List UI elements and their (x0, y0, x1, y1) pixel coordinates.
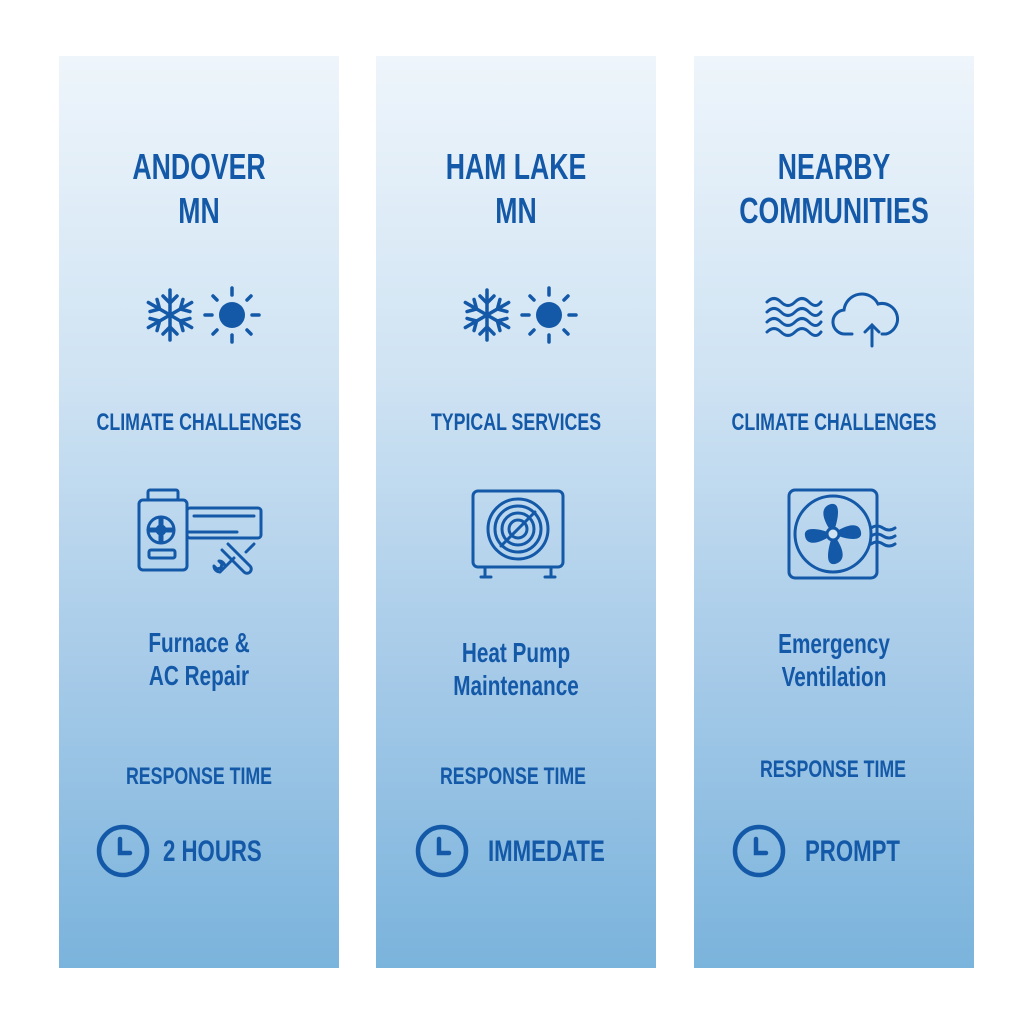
title: Ham Lake MN (446, 146, 586, 231)
panel: Ham Lake (376, 56, 656, 968)
value: prompt: PROMPT (805, 835, 900, 868)
panel: Nearby (694, 56, 974, 968)
icon: clock (96, 824, 150, 878)
icon: clock (416, 824, 468, 878)
icon: snowflake and sun (Ham Lake) (464, 286, 578, 344)
title: Nearby Communities: NEARBY (778, 146, 890, 187)
value: 2 hours: 2 HOURS (163, 835, 262, 868)
label: typical services: TYPICAL SERVICES (431, 409, 601, 436)
icon: heat pump outdoor unit (472, 490, 564, 578)
text: Furnace & AC Repair: Furnace & (148, 627, 250, 658)
text: Emergency Ventilation (778, 628, 890, 692)
title: Andover MN (132, 146, 266, 231)
icon: ventilation fan (788, 488, 897, 580)
text: Heat Pump Maintenance (453, 637, 579, 701)
title: Andover MN: MN (178, 190, 220, 231)
text: Furnace & AC Repair: AC Repair (149, 660, 249, 691)
text: Emergency Ventilation: Ventilation (782, 661, 886, 692)
title: Ham Lake MN: HAM LAKE (446, 146, 586, 187)
label: climate challenges (Andover): CLIMATE CHALLENGES (97, 409, 301, 436)
icon: waves and cloud (Nearby) (765, 292, 900, 348)
value: immedate: IMMEDATE (488, 835, 605, 868)
label: climate challenges (Nearby): CLIMATE CHALLENGES (732, 409, 936, 436)
title: Ham Lake MN: MN (495, 190, 537, 231)
label: response time (Ham Lake): RESPONSE TIME (440, 763, 586, 790)
text: Heat Pump Maintenance: Heat Pump (462, 637, 570, 668)
panel: Andover (59, 56, 339, 968)
label: response time (Nearby): RESPONSE TIME (760, 756, 906, 783)
text: Emergency Ventilation: Emergency (778, 628, 890, 659)
title: Andover MN: ANDOVER (132, 146, 266, 187)
icon: snowflake and sun (Andover) (146, 286, 261, 344)
label: response time (Andover): RESPONSE TIME (126, 763, 272, 790)
icon: furnace and AC with wrench (138, 488, 262, 575)
title: Nearby Communities (739, 146, 929, 231)
response row: prompt (732, 824, 900, 878)
response row: immediate (416, 824, 605, 878)
response row: 2 hours (96, 824, 262, 878)
title: Nearby Communities: COMMUNITIES (739, 190, 929, 231)
text: Heat Pump Maintenance: Maintenance (453, 670, 579, 701)
icon: clock (732, 824, 786, 878)
text: Furnace & AC Repair (148, 627, 250, 691)
